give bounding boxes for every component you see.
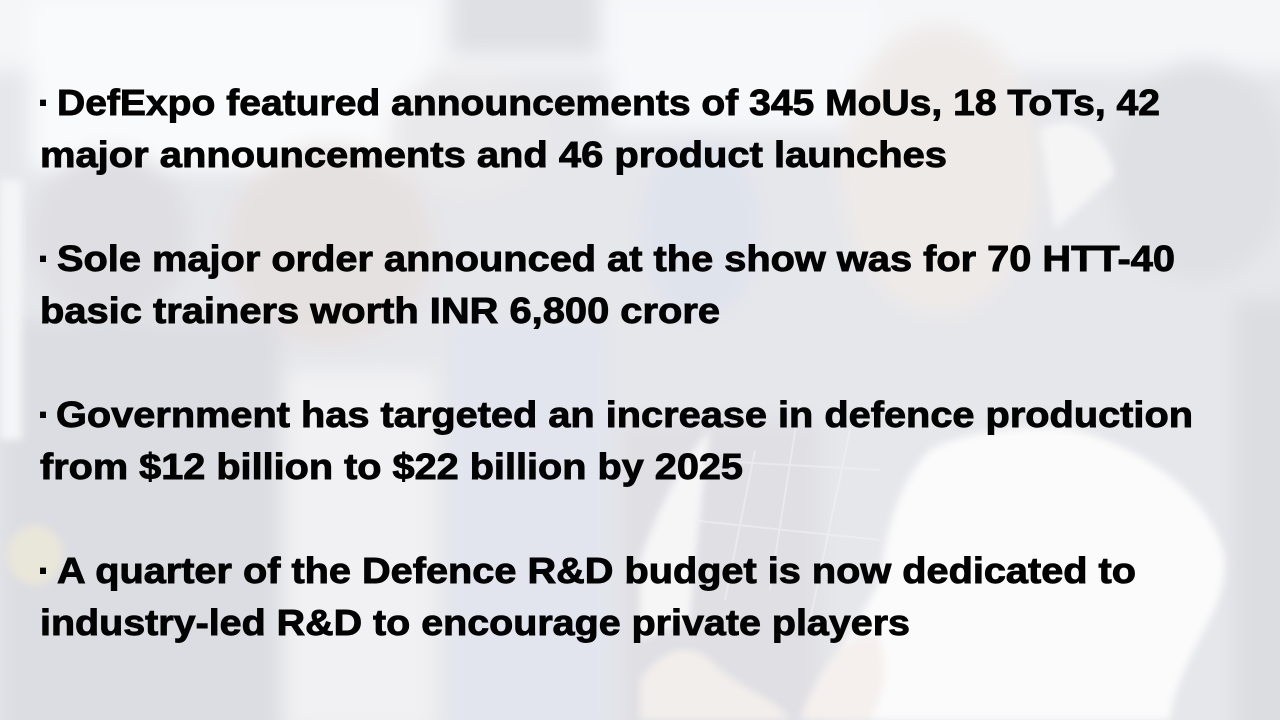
jacket check lines bbox=[690, 400, 880, 620]
bullet 2: Sole major order announced at the show was for 70 HTT-40 bbox=[57, 238, 1175, 279]
bullet 4: industry-led R&D to encourage private players bbox=[40, 602, 910, 643]
bullet 1: DefExpo featured announcements of 345 MoUs, 18 ToTs, 42 bbox=[57, 82, 1160, 123]
bullet 1 bbox=[38, 82, 1160, 175]
bullet 2 bbox=[38, 238, 1175, 331]
bullet 1: major announcements and 46 product launches bbox=[40, 134, 947, 175]
bullet 1: · bbox=[38, 82, 50, 123]
white kurta bbox=[800, 427, 1225, 720]
bullet 4 bbox=[38, 550, 1136, 643]
bullet 4: · bbox=[38, 550, 50, 591]
bullet 3: · bbox=[38, 394, 50, 435]
bullet 2: · bbox=[38, 238, 50, 279]
bullet 4: A quarter of the Defence R&D budget is now dedicated to bbox=[57, 550, 1136, 591]
bullet 2: basic trainers worth INR 6,800 crore bbox=[40, 290, 720, 331]
bullet 3: Government has targeted an increase in defence production bbox=[56, 394, 1193, 435]
bullet 3 bbox=[38, 394, 1193, 487]
bullet 3: from $12 billion to $22 billion by 2025 bbox=[40, 446, 743, 487]
